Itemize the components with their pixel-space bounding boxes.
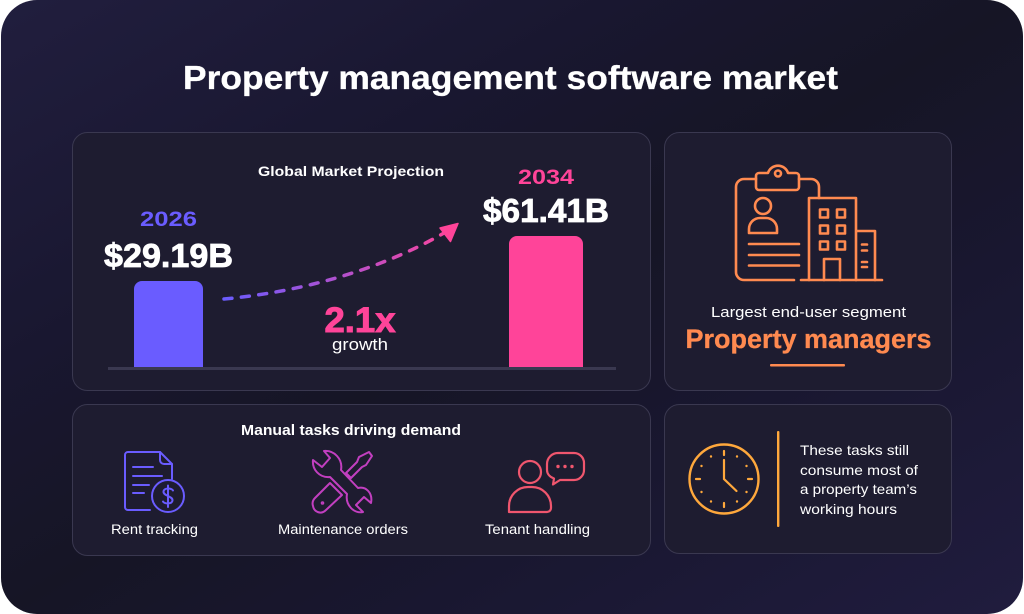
icon: clipboard and building [736,166,882,280]
underline [770,364,845,366]
chart baseline [108,367,616,370]
segment caption: Largest end-user segment [711,304,907,321]
task: rent tracking [111,452,198,537]
bar: 2034 [509,236,583,368]
arrow: growth [224,224,458,299]
divider [777,431,779,527]
label: 2034: 2034 [518,166,574,189]
icon: rent document [125,452,184,512]
note text [799,442,918,517]
value: 2026: $29.19B [104,237,233,274]
note text: a property team’s [800,481,917,497]
growth multiple: 2.1x [324,301,396,340]
title: Property management software market [183,59,838,96]
note text: These tasks still [800,442,909,458]
speech dots [556,465,574,468]
icon: person with speech bubble [509,453,584,512]
label: Rent tracking [111,522,198,537]
panel: largest end-user segment [664,132,952,390]
note text: consume most of [800,462,918,478]
tasks heading: Manual tasks driving demand [241,423,461,439]
note text: working hours [799,501,897,517]
panel: working hours [664,404,952,554]
panel: global market projection [72,132,650,390]
icon: wrench and screwdriver [313,451,372,513]
task: tenant handling [485,453,590,537]
label: Tenant handling [485,522,590,537]
bar: 2026 [134,281,203,368]
segment name: Property managers [686,324,932,354]
icon: clock [690,444,758,514]
chart heading: Global Market Projection [258,163,444,179]
growth label: growth [332,335,388,354]
value: 2034: $61.41B [483,192,609,229]
task: maintenance orders [278,451,408,537]
panel: manual tasks [72,404,650,556]
label: 2026: 2026 [140,208,197,231]
label: Maintenance orders [278,522,408,537]
